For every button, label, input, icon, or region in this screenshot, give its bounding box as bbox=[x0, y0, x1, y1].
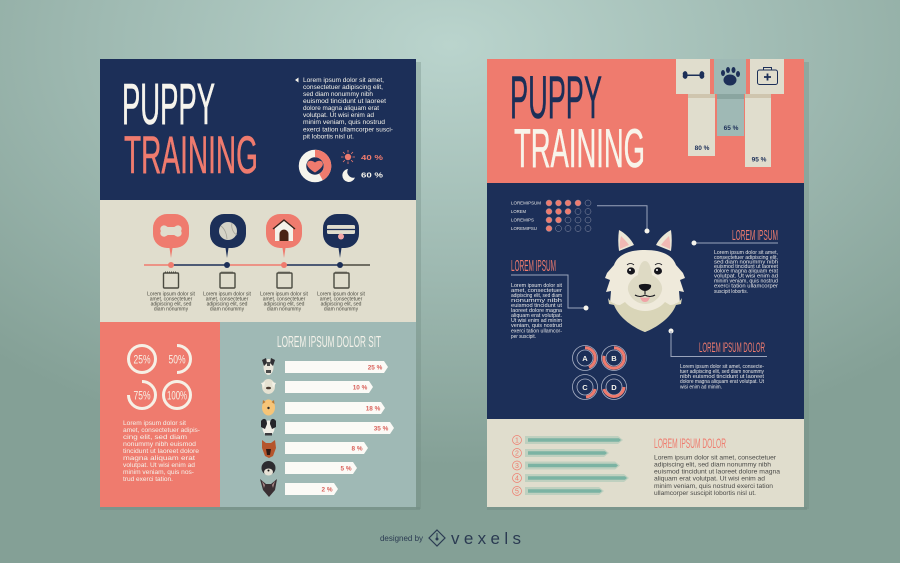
callout: bottom: Lorem ipsum dolor sit amet, consecte- bbox=[680, 364, 764, 370]
label: 40 percent: 40 % bbox=[361, 153, 383, 162]
column: first aid 95 percent bbox=[745, 59, 784, 167]
callout: left: per suscipit. bbox=[511, 334, 536, 340]
step 3: dog house: amet, consectetuer bbox=[263, 296, 306, 302]
rating dots bbox=[511, 200, 591, 232]
callout: bottom: tuer adipiscing elit, sed diam nonummy bbox=[680, 369, 764, 375]
text block: rings: magna aliquam erat bbox=[123, 455, 195, 462]
footer: vexels credit: vexels bbox=[451, 529, 521, 548]
ring 75 percent bbox=[128, 382, 156, 408]
step 3: dog house: adipiscing elit, sed bbox=[264, 302, 305, 308]
callout: left: adipiscing elit, sed diam bbox=[511, 293, 563, 299]
text block: rings: tincidunt ut laoreet dolore bbox=[123, 448, 199, 455]
ring 100 percent bbox=[164, 382, 190, 408]
panel: left poster header: PUPPY bbox=[122, 72, 215, 137]
icon: dog 7 bbox=[260, 479, 277, 497]
bar 18 percent: 18 % bbox=[366, 406, 381, 412]
text block: intro: consectetuer adipiscing elit, bbox=[303, 84, 383, 91]
step 2: ball: diam nonummy bbox=[210, 306, 245, 312]
text block: rings: minim veniam, quis nos- bbox=[123, 469, 194, 476]
icon: bullet arrow bbox=[295, 78, 298, 82]
callout: left: veniam, quis nostrud bbox=[511, 323, 562, 329]
panel: left poster header bbox=[100, 59, 416, 200]
icon: dog 2 bbox=[261, 379, 276, 394]
row 1 bbox=[512, 436, 623, 444]
row 5: 5 bbox=[515, 488, 519, 496]
ring 50 percent: 50% bbox=[168, 352, 186, 366]
column: bone 80 percent: 80 % bbox=[695, 145, 710, 152]
callout: left: amet, consectetuer bbox=[511, 288, 562, 294]
ring chart B bbox=[602, 346, 626, 370]
ring chart D: D bbox=[611, 383, 617, 392]
callout: left: Lorem ipsum dolor sit bbox=[511, 283, 563, 289]
bar 2 percent bbox=[285, 483, 338, 495]
callout: bottom: dolore magna aliquam erat volutpat. Ut bbox=[680, 379, 764, 385]
text block: rings: volutpat. Ut wisi enim ad bbox=[123, 462, 195, 469]
text block: intro: minim veniam, quis nostrud bbox=[303, 119, 385, 126]
row 3 bbox=[512, 461, 620, 470]
step 1: bone: adipiscing elit, sed bbox=[151, 302, 192, 308]
row 4 bbox=[512, 474, 629, 482]
bar 35 percent: 35 % bbox=[374, 426, 389, 432]
step 1: bone: diam nonummy bbox=[154, 306, 189, 312]
bar 8 percent bbox=[285, 442, 368, 454]
text block: intro: dolore magna aliquam erat bbox=[303, 105, 379, 112]
text block: intro: volutpat. Ut wisi enim ad bbox=[303, 112, 374, 119]
bar 35 percent bbox=[285, 422, 394, 434]
callout: left: laoreet dolore magna bbox=[511, 308, 562, 314]
icon: dog 3 bbox=[262, 400, 275, 416]
bar 25 percent: 25 % bbox=[368, 364, 383, 372]
callout: left: euismod tincidunt ut bbox=[511, 303, 563, 309]
callout: right: exerci tation ullamcorper bbox=[714, 284, 778, 290]
icon: dog 6 bbox=[262, 461, 276, 476]
step 3: dog house bbox=[260, 214, 309, 312]
heading: bars: LOREM IPSUM DOLOR SIT bbox=[277, 334, 381, 351]
bar 10 percent bbox=[285, 381, 373, 393]
footer: vexels credit: designed by bbox=[380, 533, 424, 543]
connector: ratings to dog bbox=[597, 206, 650, 234]
panel: right poster dog profile bbox=[487, 183, 804, 419]
bar 25 percent bbox=[285, 361, 388, 373]
callout: bottom: nibh euismod tincidunt ut laoreet bbox=[680, 374, 765, 380]
callout: left: aliquam erat volutpat. bbox=[511, 313, 562, 319]
panel: right poster dog profile: LOREM IPSUM bbox=[732, 227, 778, 244]
text block: intro: pit lobortis nisl ut. bbox=[303, 134, 354, 140]
callout: left: nonummy nibh bbox=[511, 298, 562, 304]
callout: right: Lorem ipsum dolor sit amet, bbox=[714, 250, 778, 256]
text block: intro: sed diam nonummy nibh bbox=[303, 91, 373, 98]
text block: list: minim veniam, quis nostrud exerci tation bbox=[654, 483, 773, 490]
step 2: ball: adipiscing elit, sed bbox=[207, 302, 248, 308]
callout: right: suscipit lobortis. bbox=[714, 289, 748, 295]
step 2: ball: Lorem ipsum dolor sit bbox=[203, 292, 252, 298]
bar 18 percent bbox=[285, 402, 385, 414]
text block: list: Lorem ipsum dolor sit amet, consectetuer bbox=[654, 454, 777, 462]
ring chart B: B bbox=[611, 354, 617, 363]
text block: list: ullamcorper suscipit lobortis nisl ut. bbox=[654, 490, 756, 497]
panel: right poster list bbox=[487, 419, 804, 507]
step 4: collar: Lorem ipsum dolor sit bbox=[317, 292, 366, 298]
bar 2 percent: 2 % bbox=[321, 486, 333, 494]
panel: left poster timeline bbox=[100, 200, 416, 322]
callout: left bbox=[511, 258, 588, 340]
step 4: collar: adipiscing elit, sed bbox=[321, 302, 362, 308]
step 1: bone bbox=[147, 214, 196, 312]
column: paw 65 percent bbox=[714, 59, 746, 136]
footer: vexels credit bbox=[380, 529, 521, 548]
timeline axis bbox=[144, 264, 370, 266]
step 4: collar: diam nonummy bbox=[324, 306, 359, 312]
step 4: collar bbox=[317, 214, 366, 312]
icon: dog 1 bbox=[262, 358, 275, 375]
row 4: 4 bbox=[515, 476, 519, 482]
panel: left poster breed bars bbox=[220, 322, 416, 507]
ring chart C: C bbox=[582, 383, 588, 392]
bar 10 percent: 10 % bbox=[353, 384, 368, 392]
panel: right poster header bbox=[487, 59, 804, 183]
text block: list: aliquam erat volutpat. Ut wisi enim ad bbox=[654, 476, 765, 482]
rating dots: LOREMIPSUM bbox=[511, 200, 541, 206]
panel: right poster header: PUPPY bbox=[510, 64, 602, 131]
callout: right: euismod tincidunt ut laoreet bbox=[714, 264, 779, 270]
rating dots: LOREMIPSU bbox=[511, 226, 537, 231]
panel: right poster list: LOREM IPSUM DOLOR bbox=[654, 435, 726, 451]
row 1: 1 bbox=[515, 438, 519, 444]
icon: dog 4 bbox=[261, 419, 276, 436]
text block: list: adipiscing elit, sed diam nonummy nibh bbox=[654, 462, 771, 468]
ring chart C bbox=[572, 374, 598, 400]
text block: intro: Lorem ipsum dolor sit amet, bbox=[303, 77, 384, 84]
row 2: 2 bbox=[515, 450, 519, 458]
callout: right: minim veniam, quis nostrud bbox=[714, 278, 778, 284]
illustration: dog head bbox=[605, 230, 685, 332]
icon: moon bbox=[342, 169, 355, 182]
callout: right: sed diam nonummy nibh bbox=[714, 260, 778, 266]
row 3: 3 bbox=[515, 463, 519, 470]
text block: intro: exerci tation ullamcorper susci- bbox=[303, 126, 393, 134]
row 2 bbox=[512, 448, 609, 458]
step 2: ball: amet, consectetuer bbox=[206, 296, 249, 302]
ring 50 percent bbox=[168, 346, 190, 372]
text block: rings: nonummy nibh euismod bbox=[123, 441, 196, 448]
row 5 bbox=[512, 486, 604, 496]
step 3: dog house: diam nonummy bbox=[267, 306, 302, 312]
callout: left: LOREM IPSUM bbox=[511, 258, 556, 275]
text block: list: euismod tincidunt ut laoreet dolore magna bbox=[654, 468, 780, 476]
text block: intro: euismod tincidunt ut laoreet bbox=[303, 98, 386, 105]
step 1: bone: amet, consectetuer bbox=[150, 296, 193, 302]
callout: bottom: wisi enim ad minim. bbox=[680, 384, 722, 390]
bar 5 percent: 5 % bbox=[340, 466, 352, 472]
rating dots: LOREMIPS bbox=[511, 218, 534, 222]
text block: intro bbox=[303, 77, 393, 140]
text block: rings: Lorem ipsum dolor sit bbox=[123, 420, 186, 427]
panel: left poster percentage rings bbox=[100, 322, 220, 507]
chart: donut 40 60 bbox=[302, 153, 328, 178]
ring chart A bbox=[572, 346, 598, 370]
callout: right: volutpat. Ut wisi enim ad bbox=[714, 274, 778, 280]
text block: rings: cing elit, sed diam bbox=[123, 434, 187, 441]
text block: rings bbox=[123, 420, 200, 483]
bar 5 percent bbox=[285, 462, 357, 474]
callout: right bbox=[692, 227, 779, 295]
step 4: collar: amet, consectetuer bbox=[320, 296, 363, 302]
ring 25 percent bbox=[128, 346, 156, 372]
ring 75 percent: 75% bbox=[134, 388, 151, 402]
ring 25 percent: 25% bbox=[134, 352, 151, 366]
step 1: bone: Lorem ipsum dolor sit bbox=[147, 292, 196, 298]
panel: right poster dog profile: LOREM IPSUM DOLOR bbox=[699, 339, 765, 355]
step 2: ball bbox=[203, 214, 252, 312]
callout: left: exerci tation ullamcor- bbox=[511, 328, 562, 334]
panel: right poster header: TRAINING bbox=[514, 117, 645, 179]
callout: right: dolore magna aliquam erat bbox=[714, 268, 779, 274]
icon: dog 5 bbox=[262, 440, 276, 458]
text block: list bbox=[654, 454, 780, 497]
ring chart A: A bbox=[582, 354, 588, 363]
callout: left: Ut wisi enim ad minim bbox=[511, 318, 563, 324]
icon: sun bbox=[341, 150, 355, 164]
column: bone 80 percent bbox=[676, 59, 715, 156]
callout: right: consectetuer adipiscing elit, bbox=[714, 255, 778, 261]
callout: bottom bbox=[668, 328, 767, 390]
text block: rings: trud exerci tation. bbox=[123, 476, 173, 483]
step 3: dog house: Lorem ipsum dolor sit bbox=[260, 292, 309, 298]
bar 8 percent: 8 % bbox=[351, 446, 363, 452]
label: 60 percent: 60 % bbox=[361, 170, 383, 180]
column: first aid 95 percent: 95 % bbox=[752, 156, 767, 164]
ring chart D bbox=[602, 374, 626, 400]
column: paw 65 percent: 65 % bbox=[724, 125, 739, 132]
ring 100 percent: 100% bbox=[167, 388, 187, 402]
text block: rings: amet, consectetuer adipis- bbox=[123, 427, 200, 434]
title: training: TRAINING bbox=[124, 126, 258, 185]
rating dots: LOREM bbox=[511, 209, 526, 214]
